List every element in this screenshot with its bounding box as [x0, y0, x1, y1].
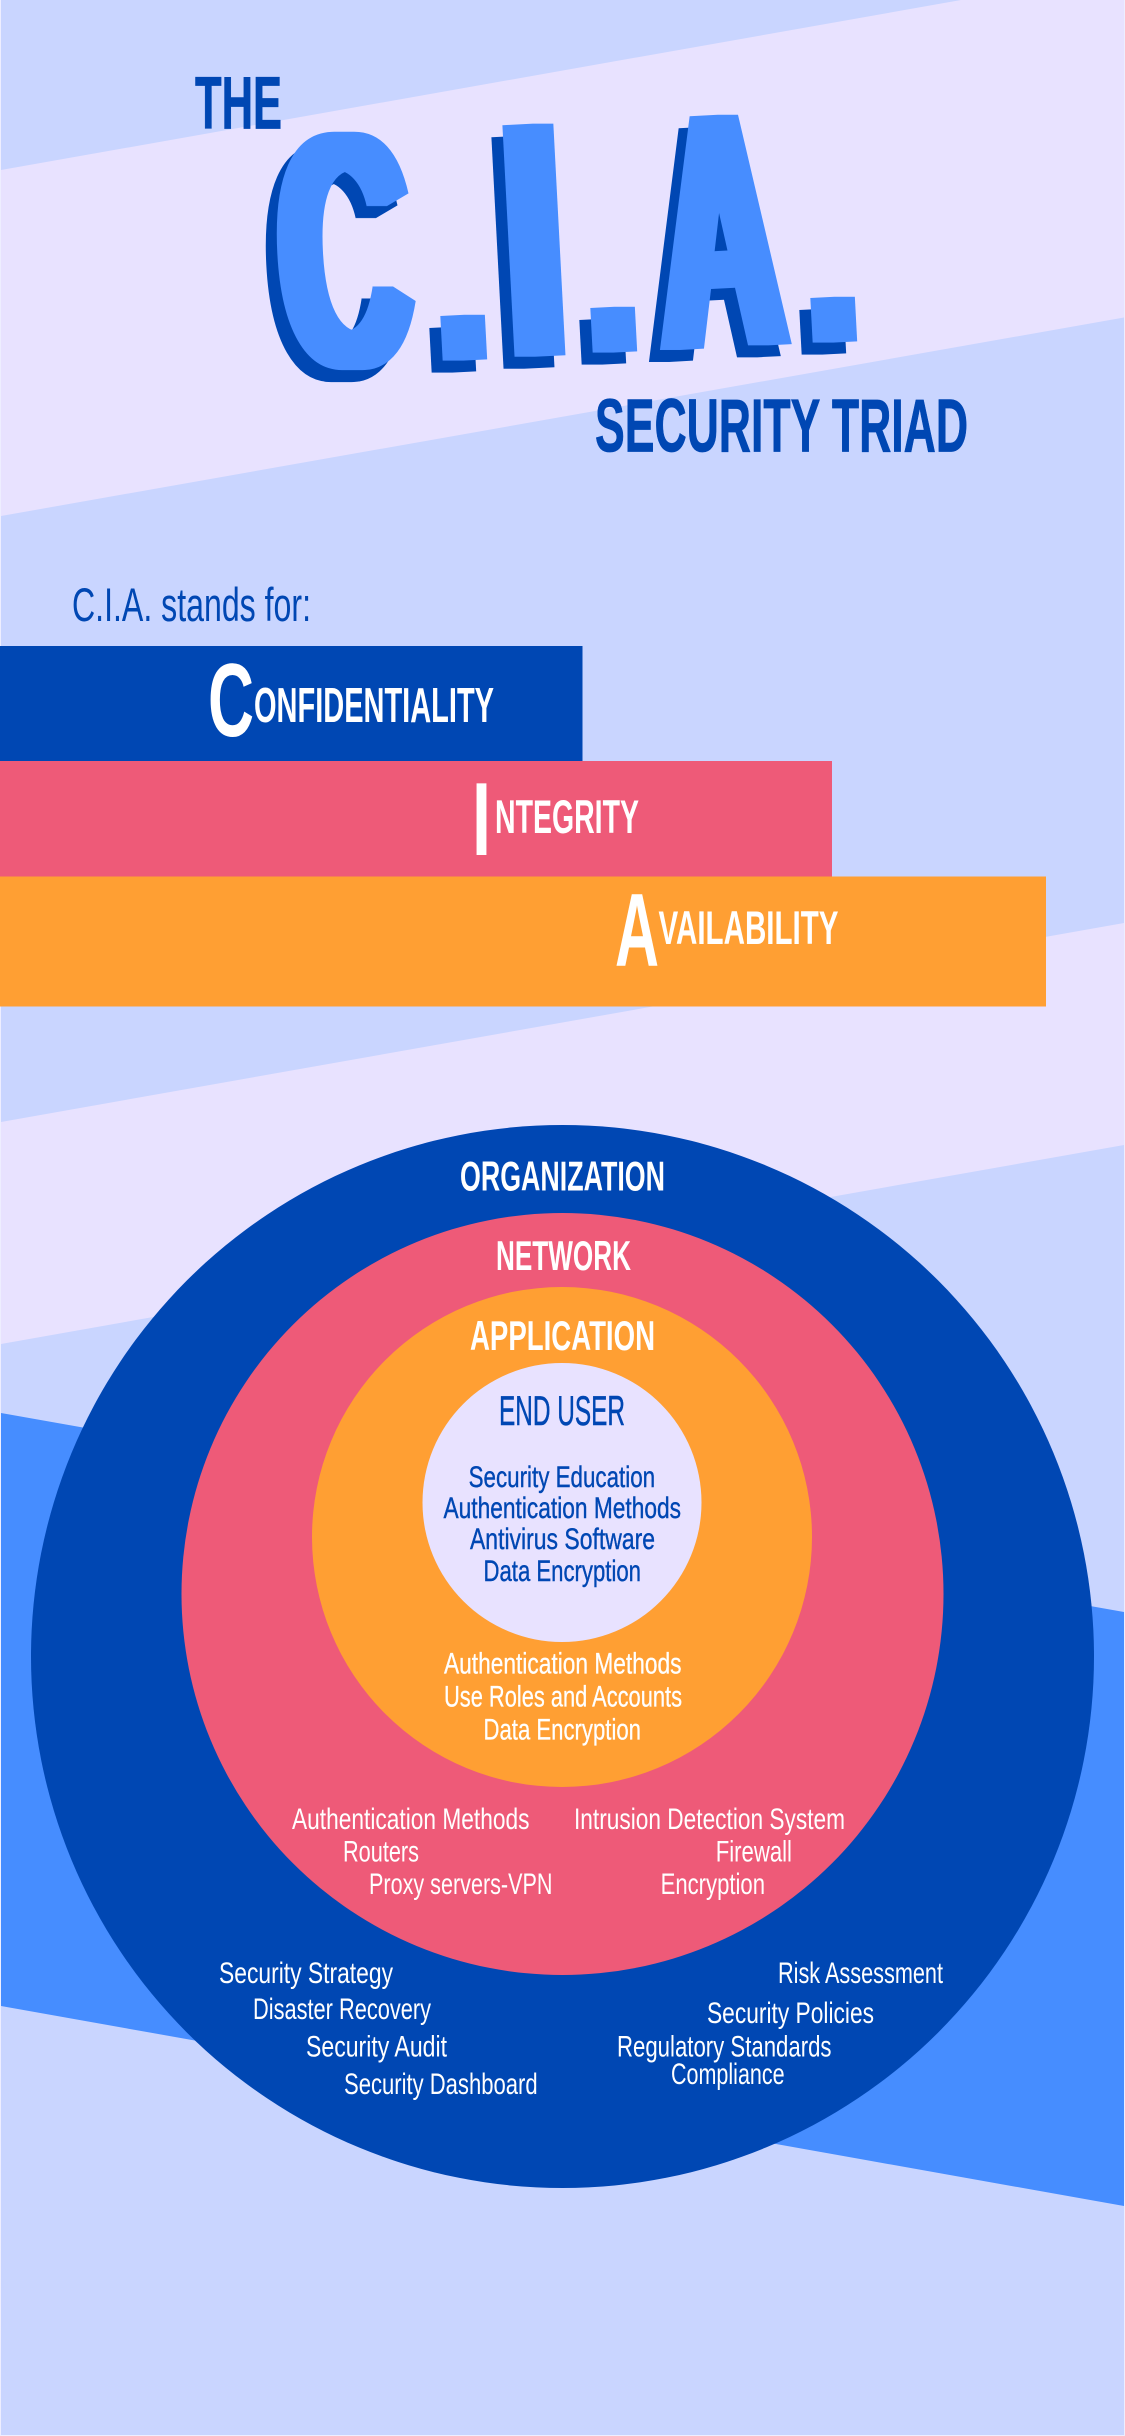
heading: C.I.A.: I	[494, 50, 574, 429]
list: network items left: Routers	[343, 1836, 419, 1869]
layer: end user: END USER	[499, 1387, 625, 1434]
layer: network: NETWORK	[496, 1232, 631, 1279]
list: end user items: Data Encryption	[484, 1555, 641, 1588]
list: network items right: Firewall	[716, 1836, 792, 1869]
heading: C.I.A. shadow: I	[483, 62, 563, 441]
heading: C.I.A.: .	[427, 88, 492, 425]
list: organization items right	[617, 1957, 943, 2091]
list: application items	[444, 1648, 682, 1746]
heading: C.I.A. shadow: .	[566, 92, 631, 429]
panel: integrity bar	[0, 761, 832, 878]
list: network items left: Proxy servers-VPN	[369, 1868, 552, 1901]
heading: C.I.A. shadow: C	[259, 72, 407, 455]
layer: end user	[422, 1363, 702, 1642]
heading: C.I.A.: C	[270, 60, 418, 443]
list: application items: Data Encryption	[484, 1714, 641, 1746]
list: organization items right: Regulatory Standards	[617, 2031, 832, 2064]
list: end user items: Antivirus Software	[470, 1523, 655, 1556]
list: network items right: Encryption	[661, 1868, 765, 1901]
list: network items left	[292, 1803, 552, 1901]
list: organization items right: Security Policies	[707, 1997, 874, 2030]
heading: C.I.A. shadow: .	[416, 100, 481, 437]
panel: confidentiality bar	[0, 643, 582, 761]
panel: availability bar: A	[615, 873, 659, 989]
panel: availability bar: VAILABILITY	[658, 901, 838, 954]
intro text: C.I.A. stands for:	[72, 578, 311, 631]
list: network items right	[574, 1803, 845, 1901]
list: organization items right: Risk Assessment	[778, 1957, 943, 1990]
heading: C.I.A.: .	[797, 70, 862, 407]
list: organization items right: Compliance	[671, 2058, 785, 2091]
panel: confidentiality bar: C	[208, 643, 254, 759]
heading: C.I.A.: .	[577, 80, 642, 417]
list: organization items left: Security Strategy	[219, 1957, 393, 1990]
list: organization items left	[219, 1957, 538, 2101]
layer: network	[182, 1213, 944, 1975]
list: organization items left: Security Audit	[306, 2031, 448, 2064]
layer: organization: ORGANIZATION	[460, 1153, 665, 1200]
list: end user items	[444, 1461, 681, 1588]
list: network items right: Intrusion Detection System	[574, 1803, 845, 1836]
list: end user items: Authentication Methods	[444, 1492, 681, 1525]
list: network items left: Authentication Methods	[292, 1803, 530, 1836]
list: organization items left: Disaster Recovery	[253, 1993, 431, 2026]
panel: confidentiality bar: ONFIDENTIALITY	[254, 679, 494, 733]
panel: integrity bar: I	[472, 762, 491, 878]
heading: C.I.A.	[270, 40, 862, 443]
heading: C.I.A. shadow: .	[786, 82, 851, 419]
panel: availability bar	[0, 873, 1046, 1006]
heading: C.I.A.: A	[650, 40, 790, 422]
title	[195, 40, 968, 467]
chart: concentric security layers	[31, 1125, 1094, 2188]
heading: C.I.A. shadow: A	[639, 52, 779, 434]
layer: application: APPLICATION	[470, 1312, 655, 1359]
list: end user items: Security Education	[469, 1461, 655, 1494]
layer: application	[312, 1287, 812, 1787]
panel: integrity bar: NTEGRITY	[495, 790, 639, 843]
list: organization items left: Security Dashboard	[344, 2068, 538, 2101]
heading: the: THE	[195, 62, 282, 144]
heading: C.I.A. shadow	[259, 52, 851, 455]
list: application items: Use Roles and Accounts	[444, 1681, 682, 1714]
list: application items: Authentication Methods	[444, 1648, 682, 1680]
